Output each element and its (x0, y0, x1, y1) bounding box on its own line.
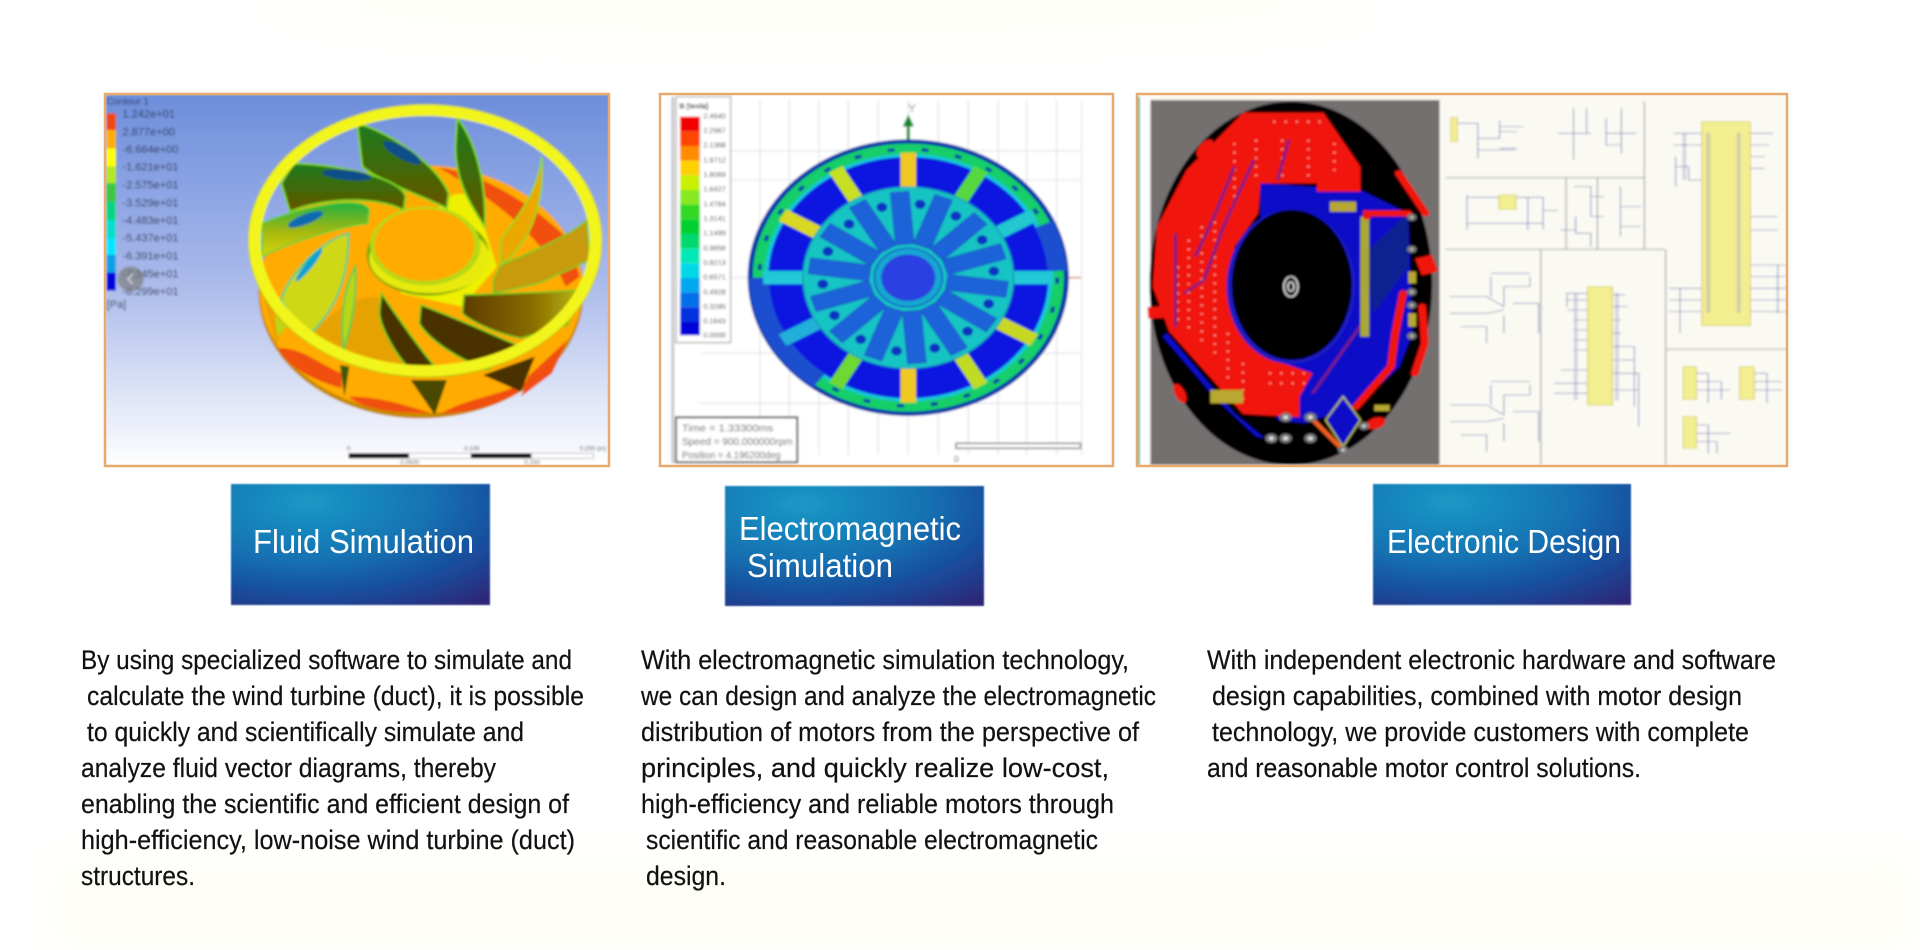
text block: electromagnetic simulation description: distribution of motors from the perspective of (641, 717, 1139, 747)
field legend: 0.0000 (703, 331, 726, 340)
panel: fluid simulation image (105, 94, 610, 467)
text block: electronic design description: With independent electronic hardware and software (1207, 645, 1776, 675)
text block: electromagnetic simulation description: design. (646, 861, 726, 891)
simulation readout box (676, 417, 797, 462)
colour legend: -4.483e+01 (122, 215, 179, 227)
heading badge: Electronic Design: Electronic Design (1387, 523, 1621, 560)
colour legend: Contour 1 (107, 97, 149, 108)
field legend: 1.1499 (703, 229, 726, 238)
field legend: 1.9712 (703, 155, 726, 164)
heading badge: Electromagnetic Simulation: Simulation (747, 547, 893, 584)
text block: electronic design description: and reasonable motor control solutions. (1207, 753, 1641, 783)
colour legend: -7.345e+01 (122, 268, 179, 280)
field legend: 0.4928 (703, 287, 726, 296)
scale bar: 0 (347, 446, 351, 453)
colour legend: -1.621e+01 (122, 162, 179, 174)
text block: fluid simulation description: analyze fluid vector diagrams, thereby (81, 753, 496, 783)
field legend: 1.8069 (703, 170, 726, 179)
text block: fluid simulation description: structures. (81, 861, 195, 891)
field legend: 2.1368 (703, 141, 726, 150)
text block: electromagnetic simulation description: high-efficiency and reliable motors through (641, 789, 1114, 819)
field legend: 2.2967 (703, 126, 726, 135)
colour legend: -3.529e+01 (122, 197, 179, 209)
text block: fluid simulation description (81, 645, 584, 891)
scale bar: 0.0500 (400, 460, 420, 467)
simulation readout box: Time = 1.33300ms (682, 423, 774, 434)
schematic sheets (1445, 102, 1787, 465)
length scale: 0 (954, 454, 959, 464)
colour legend (107, 97, 179, 311)
panel: electromagnetic simulation image (659, 94, 1114, 466)
motor cross-section (748, 139, 1069, 416)
scale bar: 0.150 (524, 460, 541, 467)
colour legend: 1.242e+01 (122, 109, 175, 121)
carousel arrow overlay (118, 266, 144, 292)
text block: fluid simulation description: By using specialized software to simulate and (81, 645, 572, 675)
colour legend: 2.877e+00 (122, 126, 175, 138)
text block: electronic design description: technology, we provide customers with complete (1212, 717, 1749, 747)
field legend: 0.6571 (703, 273, 726, 282)
colour legend: -5.437e+01 (122, 233, 179, 245)
heading badge: Electromagnetic Simulation (725, 486, 984, 606)
text block: electromagnetic simulation description: scientific and reasonable electromagnetic (646, 825, 1098, 855)
heading badge: Fluid Simulation: Fluid Simulation (253, 523, 474, 560)
simulation readout box: Position = 4.196200deg (682, 451, 781, 462)
heading badge: Electromagnetic Simulation: Electromagnetic (739, 510, 961, 547)
field legend (676, 97, 731, 343)
Y axis arrow: Y (908, 102, 916, 116)
text block: fluid simulation description: high-efficiency, low-noise wind turbine (duct) (81, 825, 575, 855)
length scale (954, 443, 1081, 464)
fan wheel (248, 104, 602, 418)
text block: fluid simulation description: to quickly and scientifically simulate and (87, 717, 524, 747)
text block: electromagnetic simulation description: we can design and analyze the electromagnetic (640, 681, 1156, 711)
text block: electromagnetic simulation description: With electromagnetic simulation technology, (641, 645, 1129, 675)
colour legend: [Pa] (107, 299, 126, 311)
field legend: 0.1643 (703, 317, 726, 326)
field legend: 1.4784 (703, 199, 726, 208)
field legend: 1.3141 (703, 214, 726, 223)
heading badge: Electronic Design (1373, 484, 1631, 605)
field legend: 2.4640 (703, 111, 726, 120)
text block: electromagnetic simulation description (640, 645, 1156, 891)
panel: electronic design image (1137, 94, 1789, 466)
heading badge: Fluid Simulation (231, 484, 490, 605)
colour legend: -2.575e+01 (122, 179, 179, 191)
scale bar (347, 446, 606, 467)
text block: electromagnetic simulation description: principles, and quickly realize low-cost, (641, 753, 1109, 783)
text block: electronic design description: design capabilities, combined with motor design (1212, 681, 1742, 711)
colour legend: -6.391e+01 (122, 250, 179, 262)
scale bar: 0.200 (m) (580, 446, 606, 453)
field legend: B [tesla] (679, 101, 709, 110)
field legend: 0.3285 (703, 302, 726, 311)
field legend: 1.6427 (703, 185, 726, 194)
Y axis arrow (903, 102, 1081, 278)
PCB layout (1150, 100, 1440, 465)
text block: fluid simulation description: enabling the scientific and efficient design of (81, 789, 569, 819)
simulation readout box: Speed = 900.000000rpm (682, 437, 793, 448)
colour legend: -6.664e+00 (122, 144, 179, 156)
text block: fluid simulation description: calculate the wind turbine (duct), it is possible (87, 681, 584, 711)
scale bar: 0.100 (464, 446, 480, 453)
field legend: 0.9856 (703, 243, 726, 252)
text block: electronic design description (1207, 645, 1776, 783)
colour legend: -8.299e+01 (122, 286, 179, 298)
field legend: 0.8213 (703, 258, 726, 267)
